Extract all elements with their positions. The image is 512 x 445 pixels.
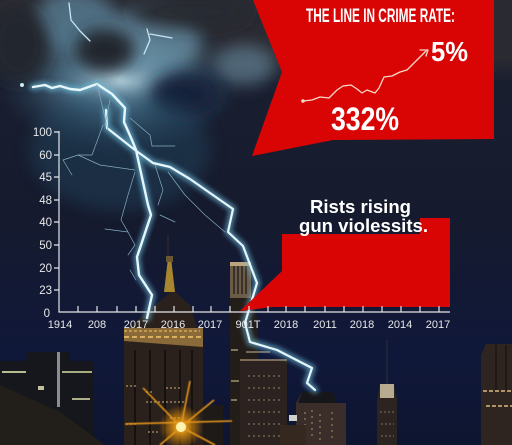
x axis labels: 2017 (198, 319, 222, 331)
x axis labels: 901T (235, 319, 261, 331)
storm clouds (0, 0, 512, 210)
y axis labels: 45 (39, 172, 52, 184)
chart (33, 127, 450, 331)
x axis labels: 2017 (124, 319, 148, 331)
lightning: upper flashes (69, 3, 172, 54)
y axis labels (33, 127, 52, 320)
lightning: main bolt left (33, 84, 152, 318)
x axis labels (48, 319, 450, 331)
building: central tower (124, 235, 223, 445)
building: small spire tower (377, 340, 397, 445)
building: left dark tower (0, 352, 93, 440)
lightning bolts (20, 3, 315, 390)
lightning: glow (33, 84, 315, 390)
y axis labels: 50 (39, 240, 52, 252)
lightning: small branches (63, 84, 225, 280)
stat 332%: 332% (331, 101, 399, 137)
axes (54, 131, 450, 312)
x axis labels: 2016 (161, 319, 185, 331)
building: right of centre tower (230, 262, 287, 445)
chart heading: Rists rising (310, 197, 411, 217)
city skyline (0, 235, 512, 445)
x axis labels: 208 (88, 319, 106, 331)
building: far right tower (481, 344, 512, 445)
top red callout panel (252, 0, 494, 156)
y axis labels: 40 (39, 217, 52, 229)
x axis labels: 2014 (388, 319, 412, 331)
y axis labels: 23 (39, 285, 52, 297)
y axis labels: 20 (39, 263, 52, 275)
lightning: main bolt right (106, 110, 315, 390)
y axis labels: 100 (33, 127, 52, 139)
building: foreground roof (0, 385, 105, 445)
x axis labels: 2018 (350, 319, 374, 331)
x axis labels: 2018 (274, 319, 298, 331)
y axis labels: 0 (44, 308, 50, 320)
rising trend line with arrow (303, 50, 428, 101)
x axis labels: 2017 (426, 319, 450, 331)
chart heading (299, 197, 428, 236)
lower red area (240, 218, 450, 311)
lightning: flash dot (20, 83, 24, 87)
x axis labels: 1914 (48, 319, 72, 331)
x axis labels: 2011 (313, 319, 337, 331)
building: lower right tower (280, 392, 346, 445)
chart heading: gun violessits. (299, 216, 428, 236)
street light starburst (125, 381, 232, 445)
stat 5%: 5% (431, 36, 468, 67)
panel shape (252, 0, 494, 156)
y axis labels: 60 (39, 150, 52, 162)
y axis labels: 48 (39, 195, 52, 207)
